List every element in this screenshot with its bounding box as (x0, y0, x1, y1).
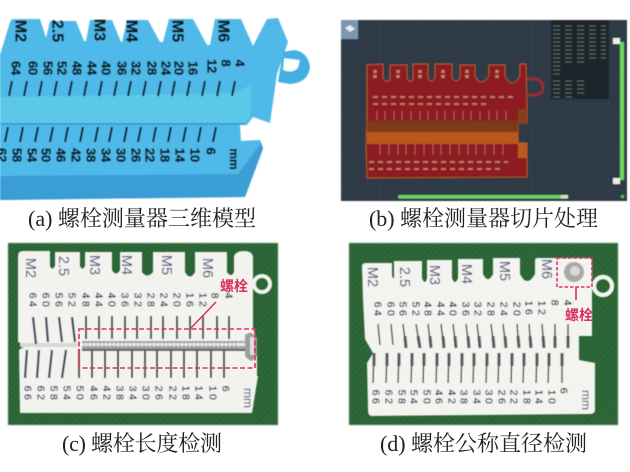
lower length numbers (369, 388, 569, 406)
lower length numbers: 38 (457, 390, 469, 406)
upper length numbers: 28 (144, 293, 156, 309)
lower length numbers: 22 (142, 148, 157, 162)
tooth size labels (364, 259, 593, 410)
upper length numbers: 48 (69, 61, 84, 75)
red bolt label: 螺栓 (220, 278, 248, 294)
red bolt label: 螺栓 (565, 307, 593, 323)
vertical green slider (620, 42, 624, 180)
lower length numbers: 66 (21, 386, 33, 402)
lower length numbers: 38 (83, 148, 98, 162)
upper length numbers: 48 (79, 293, 91, 309)
dashed highlight box (79, 329, 255, 368)
upper length numbers: 4 (232, 59, 247, 67)
upper length numbers: 40 (105, 293, 117, 309)
hanging ring (254, 276, 270, 292)
lower length numbers: 6 (203, 147, 218, 155)
upper length numbers: 16 (522, 301, 534, 317)
upper length numbers: 20 (510, 302, 522, 318)
upper length numbers: 16 (183, 293, 195, 309)
lower length numbers: 46 (53, 148, 68, 162)
upper length numbers: 60 (39, 293, 51, 309)
lower length numbers: 42 (445, 390, 457, 406)
thick smudged tick ends near hinge (374, 336, 568, 366)
panel c: bolt length test photo (8, 243, 278, 425)
white gauge card (362, 258, 595, 416)
upper length numbers: 12 (204, 59, 219, 73)
upper length numbers: 64 (8, 61, 23, 76)
upper length numbers: 28 (484, 302, 496, 318)
caption a: (a) 螺栓测量器三维模型 (28, 206, 256, 231)
tooth size labels: 2.5 (55, 256, 71, 276)
lower length numbers: 22 (507, 390, 519, 406)
upper length numbers: 44 (84, 61, 99, 76)
viewport background (341, 20, 627, 201)
upper length numbers: 4 (222, 293, 234, 301)
lower length numbers: 34 (126, 386, 138, 402)
panel b: slicing software screenshot (341, 20, 627, 201)
sliced red gauge (366, 64, 527, 178)
tick marks (373, 324, 568, 383)
white gauge card (18, 251, 258, 413)
upper length numbers: 36 (118, 293, 130, 309)
dashed highlight box (557, 258, 592, 287)
lower length numbers: 10 (187, 148, 202, 162)
tick lines on red gauge (377, 111, 506, 155)
upper length numbers: 12 (535, 301, 547, 317)
upper length numbers: 20 (171, 61, 186, 75)
front face (0, 174, 245, 200)
tick marks (79, 316, 229, 378)
lower length numbers: 46 (87, 386, 99, 402)
tooth size labels: M5 (158, 255, 174, 275)
green mat background (8, 243, 278, 425)
lower length numbers: 34 (470, 390, 482, 406)
lower length numbers: 42 (100, 386, 112, 402)
tooth size labels: M4 (458, 264, 474, 284)
lower length numbers: 54 (407, 390, 419, 406)
lower length numbers: 14 (532, 390, 544, 406)
size labels on teeth (11, 19, 241, 170)
lower length numbers: 26 (128, 148, 143, 162)
view cube button (341, 20, 358, 39)
lower length numbers: 38 (113, 386, 125, 402)
lower length numbers: 14 (192, 386, 204, 402)
caption b: (b) 螺栓测量器切片处理 (369, 206, 598, 231)
lower length numbers: 54 (60, 386, 72, 402)
tooth size labels: M2 (364, 267, 380, 287)
lower length numbers (21, 386, 231, 402)
tooth labels on red gauge (375, 70, 497, 79)
upper length numbers (371, 300, 573, 318)
upper length numbers (26, 293, 234, 309)
lower length numbers: 6 (557, 388, 569, 396)
upper length numbers: 56 (396, 302, 408, 318)
size labels on teeth: M5 (168, 20, 185, 42)
lower length numbers: 18 (520, 390, 532, 406)
upper length numbers: 24 (157, 293, 169, 309)
upper length numbers (8, 59, 247, 76)
upper length numbers: 52 (65, 293, 77, 309)
tooth size labels: M2 (22, 258, 38, 278)
upper length numbers: 20 (170, 293, 182, 309)
lower length numbers: 62 (382, 390, 394, 406)
caption c: (c) 螺栓长度检测 (62, 431, 222, 456)
info table rows (553, 26, 606, 97)
lower length numbers: 58 (47, 386, 59, 402)
size labels on teeth: 2.5 (48, 20, 65, 42)
upper length numbers: 48 (421, 302, 433, 318)
tooth size labels: 2.5 (396, 267, 412, 287)
tooth size labels: mm (579, 390, 593, 410)
upper length numbers: 64 (371, 302, 383, 318)
upper length numbers: 52 (409, 302, 421, 318)
upper length numbers: 32 (128, 61, 143, 75)
lower length numbers: 46 (432, 390, 444, 406)
lower tick marks (5, 127, 216, 142)
upper tick marks (9, 81, 235, 96)
upper length numbers: 16 (185, 61, 200, 75)
size labels on teeth: M3 (90, 19, 107, 41)
slot shadow (0, 123, 245, 125)
upper length numbers: 32 (131, 293, 143, 309)
upper length numbers: 56 (52, 293, 64, 309)
number rows on red gauge (369, 97, 514, 169)
upper length numbers: 40 (446, 302, 458, 318)
lower length numbers: 18 (157, 148, 172, 162)
tooth size labels: M3 (86, 255, 102, 275)
blue gauge body (0, 18, 288, 200)
tooth size labels: M6 (538, 259, 554, 279)
upper length numbers: 36 (459, 302, 471, 318)
upper length numbers: 52 (54, 61, 69, 75)
lower length numbers: 58 (395, 390, 407, 406)
upper length numbers: 56 (40, 61, 55, 75)
tooth size labels: M3 (426, 265, 442, 285)
tooth size labels (22, 255, 255, 408)
blurred ticks at left (25, 317, 75, 378)
lower length numbers: 58 (9, 148, 24, 162)
green mat background (349, 243, 618, 425)
upper length numbers: 40 (98, 61, 113, 75)
lower length numbers: 14 (172, 148, 187, 163)
tooth size labels: M6 (199, 258, 215, 278)
tooth size labels: M5 (496, 261, 512, 281)
tooth size labels: M4 (118, 255, 134, 275)
upper length numbers: 8 (218, 59, 233, 67)
raised centre hinge band (0, 84, 252, 123)
upper length numbers: 60 (25, 61, 40, 75)
pointer line (575, 287, 577, 300)
lower length numbers: 6 (219, 386, 231, 394)
lower length numbers: 10 (545, 390, 557, 406)
lower length numbers: 26 (495, 390, 507, 406)
lower length numbers: 50 (420, 390, 432, 406)
lower length numbers: 26 (152, 386, 164, 402)
tooth size labels: mm (241, 388, 255, 408)
steel bolt (82, 333, 257, 361)
upper length numbers: 60 (384, 302, 396, 318)
orange hinge bands (367, 121, 518, 132)
lower length numbers: 10 (206, 386, 218, 402)
hanging ring (278, 50, 310, 84)
info table panel (551, 20, 609, 99)
upper length numbers: 4 (561, 300, 573, 308)
lower length numbers (0, 147, 218, 163)
upper length numbers: 12 (196, 293, 208, 309)
hanging ring (594, 277, 612, 295)
panel a: 3D model of bolt gauge (0, 18, 310, 200)
ring on red gauge (527, 79, 543, 95)
corner status mark (621, 195, 624, 198)
upper length numbers: 36 (114, 61, 129, 75)
lower length numbers: 34 (98, 148, 113, 163)
lower length numbers: 54 (24, 148, 39, 163)
upper length numbers: 64 (26, 293, 38, 309)
size labels on teeth: M2 (11, 20, 28, 42)
lower length numbers: 30 (139, 386, 151, 402)
lower length numbers: 62 (34, 386, 46, 402)
caption d: (d) 螺栓公称直径检测 (380, 431, 587, 456)
bolt head (564, 262, 584, 282)
upper length numbers: 28 (144, 61, 159, 75)
upper length numbers: 24 (497, 302, 509, 318)
upper length numbers: 8 (208, 293, 220, 301)
size labels on teeth: M6 (214, 20, 231, 42)
lower length numbers: 50 (38, 148, 53, 162)
lower length numbers: 66 (369, 390, 381, 406)
lower length numbers: 30 (482, 390, 494, 406)
lower length numbers: 30 (113, 148, 128, 162)
size labels on teeth: mm (227, 148, 241, 170)
upper length numbers: 24 (158, 61, 173, 76)
upper length numbers: 32 (471, 302, 483, 318)
upper length numbers: 44 (92, 293, 104, 309)
upper length numbers: 8 (548, 300, 560, 308)
upper length numbers: 44 (434, 302, 446, 318)
lower length numbers: 50 (73, 386, 85, 402)
panel d: bolt nominal diameter test photo (349, 243, 618, 425)
lower length numbers: 42 (68, 148, 83, 162)
pointer line (190, 302, 216, 329)
hinge fold shadow (20, 343, 78, 347)
lower length numbers: 22 (166, 386, 178, 402)
horizontal green slider (398, 195, 563, 199)
lower length numbers: 18 (179, 386, 191, 402)
size labels on teeth: M4 (122, 20, 139, 42)
